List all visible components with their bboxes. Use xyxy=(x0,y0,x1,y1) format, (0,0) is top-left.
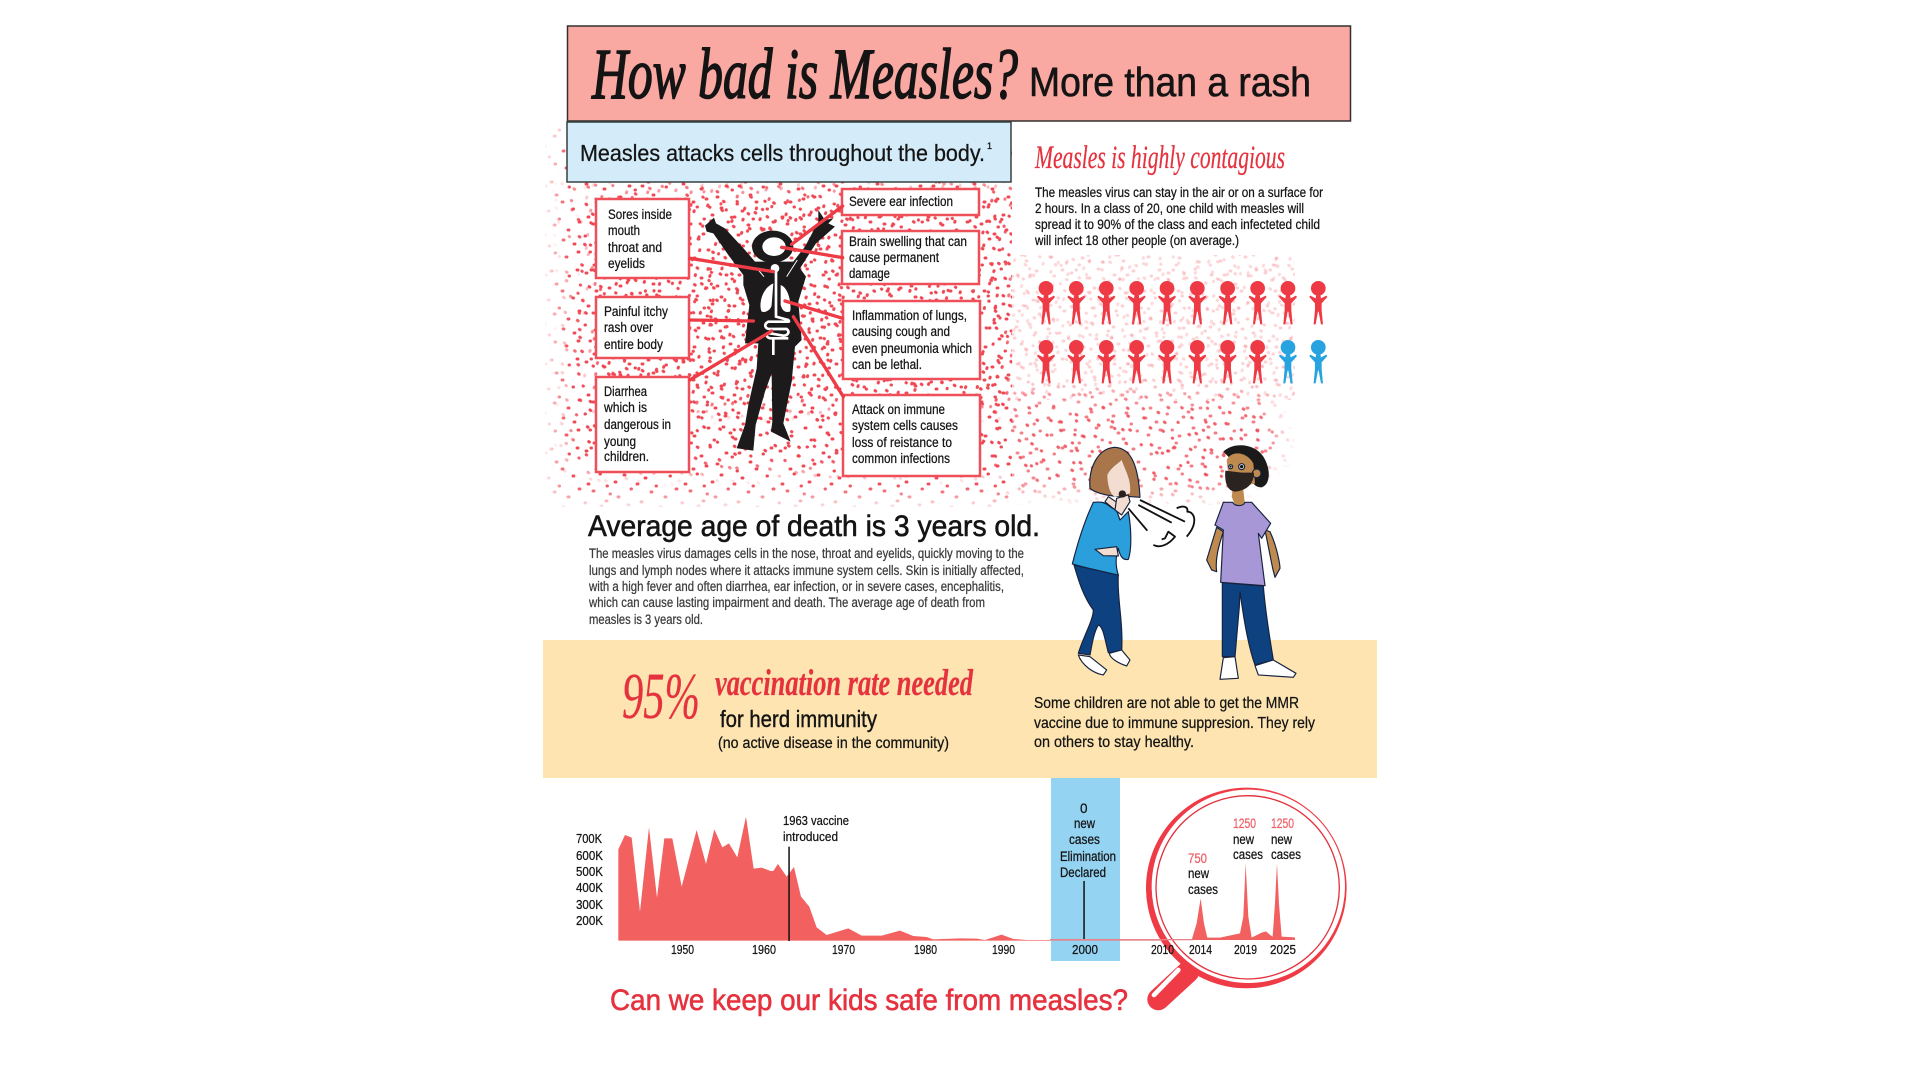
chart: y axis labels: 700K xyxy=(576,831,602,846)
chart: elimination column: new xyxy=(1074,816,1095,831)
labels: magnified peaks: 1250 xyxy=(1233,816,1256,831)
chart: elimination column: Elimination xyxy=(1060,849,1116,864)
chart: elimination column: Declared xyxy=(1060,865,1106,880)
symptom box: immune system: loss of reistance to xyxy=(852,435,952,450)
symptom box: ear infection xyxy=(842,189,979,215)
symptom box: sores xyxy=(596,199,689,278)
labels: magnified peaks: cases xyxy=(1271,847,1301,862)
text block: contagion: spread it to 90% of the class and each infecteted child xyxy=(1035,217,1320,232)
closing question: Can we keep our kids safe from measles? xyxy=(610,984,1128,1017)
chart: elimination column: 0 xyxy=(1080,801,1088,816)
chart: y axis labels: 400K xyxy=(576,880,603,895)
chart: y axis labels: 300K xyxy=(576,897,603,912)
panel: blue heading xyxy=(567,122,1011,182)
infographic xyxy=(543,25,1377,1016)
symptom box: diarrhea xyxy=(596,377,689,472)
marker: 1963 vaccine xyxy=(788,847,790,941)
symptom box: sores: mouth xyxy=(608,223,640,238)
text block: disease progression: which can cause lasting impairment and death. The average age of death from xyxy=(588,595,985,610)
text block: disease progression: measles is 3 years old. xyxy=(589,612,703,627)
panel: blue heading: Measles attacks cells throughout the body. xyxy=(580,140,985,166)
figure: child silhouette with organs xyxy=(690,206,843,451)
symptom box: sores: Sores inside xyxy=(608,207,672,222)
text: children unable to vaccinate: on others to stay healthy. xyxy=(1034,734,1194,751)
labels: magnified peaks: new xyxy=(1233,832,1254,847)
chart: x axis years: 2019 xyxy=(1234,942,1257,957)
labels: magnified peaks: 1250 xyxy=(1271,816,1294,831)
stat: 95%: 95% xyxy=(622,660,700,733)
text: no active disease: (no active disease in the community) xyxy=(718,735,949,752)
symptom box: brain swelling: cause permanent xyxy=(849,250,939,265)
symptom box: sores: eyelids xyxy=(608,256,645,271)
labels: magnified peaks: cases xyxy=(1188,882,1218,897)
symptom box: diarrhea: Diarrhea xyxy=(604,384,647,399)
title: How bad is Measles?: How bad is Measles? xyxy=(591,34,1018,114)
panel: blue heading: 1 xyxy=(987,141,992,151)
chart: x axis years: 2000 xyxy=(1072,942,1098,957)
labels: magnified peaks: new xyxy=(1271,832,1292,847)
illustration: masked child xyxy=(1207,445,1296,679)
chart: x axis years xyxy=(671,942,1296,957)
symptom box: rash: Painful itchy xyxy=(604,304,668,319)
chart: measles cases area 1942-2000 xyxy=(618,817,1267,941)
heading: average age of death xyxy=(588,510,1040,627)
chart: x axis years: 2025 xyxy=(1270,942,1296,957)
callout lines xyxy=(690,206,843,397)
symptom box: lungs xyxy=(843,301,980,379)
chart: x axis years: 1950 xyxy=(671,942,694,957)
annotation: 1963 vaccine introduced: introduced xyxy=(783,829,838,844)
chart: elimination column: cases xyxy=(1069,832,1100,847)
heading: Measles is highly contagious: Measles is highly contagious xyxy=(1034,140,1285,176)
symptom box: immune system xyxy=(843,395,980,476)
chart: y axis labels: 500K xyxy=(576,864,603,879)
chart: x axis years: 1990 xyxy=(992,942,1015,957)
chart: y axis labels: 600K xyxy=(576,848,603,863)
symptom box: diarrhea: children. xyxy=(604,449,649,464)
text block: contagion: will infect 18 other people (on average.) xyxy=(1034,233,1239,248)
illustration: coughing woman xyxy=(1072,447,1194,675)
labels: magnified peaks: new xyxy=(1188,866,1209,881)
symptom box: lungs: can be lethal. xyxy=(852,357,922,372)
text: children unable to vaccinate: vaccine due to immune suppresion. They rely xyxy=(1034,715,1315,732)
chart: elimination column xyxy=(1051,778,1120,961)
heading: average age of death: Average age of death is 3 years old. xyxy=(588,510,1040,543)
symptom box: ear infection: Severe ear infection xyxy=(849,194,953,209)
symptom box: diarrhea: dangerous in xyxy=(604,417,671,432)
pictogram: 18 of 20 children infected xyxy=(1037,281,1327,383)
panel: title banner xyxy=(568,26,1350,121)
text block: disease progression: with a high fever and often diarrhea, ear infection, or in severe cases, encephalitis, xyxy=(588,579,1004,594)
text block: disease progression: lungs and lymph nodes where it attacks immune system cells. Skin is initially affected, xyxy=(589,563,1024,578)
chart: x axis years: 1970 xyxy=(832,942,855,957)
heading: vaccination rate needed: vaccination rate needed xyxy=(715,663,973,704)
panel: herd immunity band xyxy=(543,640,1377,778)
text: children unable to vaccinate xyxy=(1034,695,1315,751)
text block: contagion xyxy=(1034,185,1323,248)
symptom box: rash: rash over xyxy=(604,320,653,335)
symptom box: immune system: Attack on immune xyxy=(852,402,945,417)
labels: magnified peaks: 750 xyxy=(1188,851,1207,866)
text block: contagion: 2 hours. In a class of 20, one child with measles will xyxy=(1035,201,1304,216)
symptom box: immune system: system cells causes xyxy=(852,418,958,433)
chart: x axis years: 1980 xyxy=(914,942,937,957)
symptom box: brain swelling: damage xyxy=(849,266,890,281)
symptom box: diarrhea: which is xyxy=(603,400,647,415)
heading: Measles is highly contagious xyxy=(1034,140,1323,248)
symptom box: brain swelling xyxy=(842,231,979,284)
symptom box: immune system: common infections xyxy=(852,451,950,466)
chart: x axis years: 2010 xyxy=(1151,942,1174,957)
chart: y axis labels xyxy=(576,831,603,928)
symptom box: lungs: causing cough and xyxy=(852,324,950,339)
text block: disease progression: The measles virus damages cells in the nose, throat and eyelids, quickly moving to the xyxy=(589,546,1024,561)
labels: magnified peaks xyxy=(1188,816,1301,897)
text block: contagion: The measles virus can stay in the air or on a surface for xyxy=(1035,185,1323,200)
text: for herd immunity: for herd immunity xyxy=(720,706,877,732)
symptom box: sores: throat and xyxy=(608,240,662,255)
chart: y axis labels: 200K xyxy=(576,913,603,928)
subtitle: More than a rash: More than a rash xyxy=(1029,59,1311,105)
symptom box: lungs: Inflammation of lungs, xyxy=(852,308,967,323)
symptom box: brain swelling: Brain swelling that can xyxy=(849,234,967,249)
chart: magnified recent outbreaks xyxy=(1192,863,1295,940)
text block: disease progression xyxy=(588,546,1024,627)
symptom box: rash xyxy=(596,297,689,358)
labels: magnified peaks: cases xyxy=(1233,847,1263,862)
background dots: virus particles xyxy=(545,122,1295,507)
symptom box: rash: entire body xyxy=(604,337,663,352)
chart: x axis years: 2014 xyxy=(1189,942,1212,957)
icon: magnifying glass xyxy=(1146,788,1347,999)
chart: x axis years: 1960 xyxy=(752,942,776,957)
symptom box: diarrhea: young xyxy=(604,434,636,449)
text: children unable to vaccinate: Some children are not able to get the MMR xyxy=(1034,695,1299,712)
annotation: 1963 vaccine introduced xyxy=(783,813,849,844)
annotation: 1963 vaccine introduced: 1963 vaccine xyxy=(783,813,849,828)
symptom box: lungs: even pneumonia which xyxy=(852,341,972,356)
